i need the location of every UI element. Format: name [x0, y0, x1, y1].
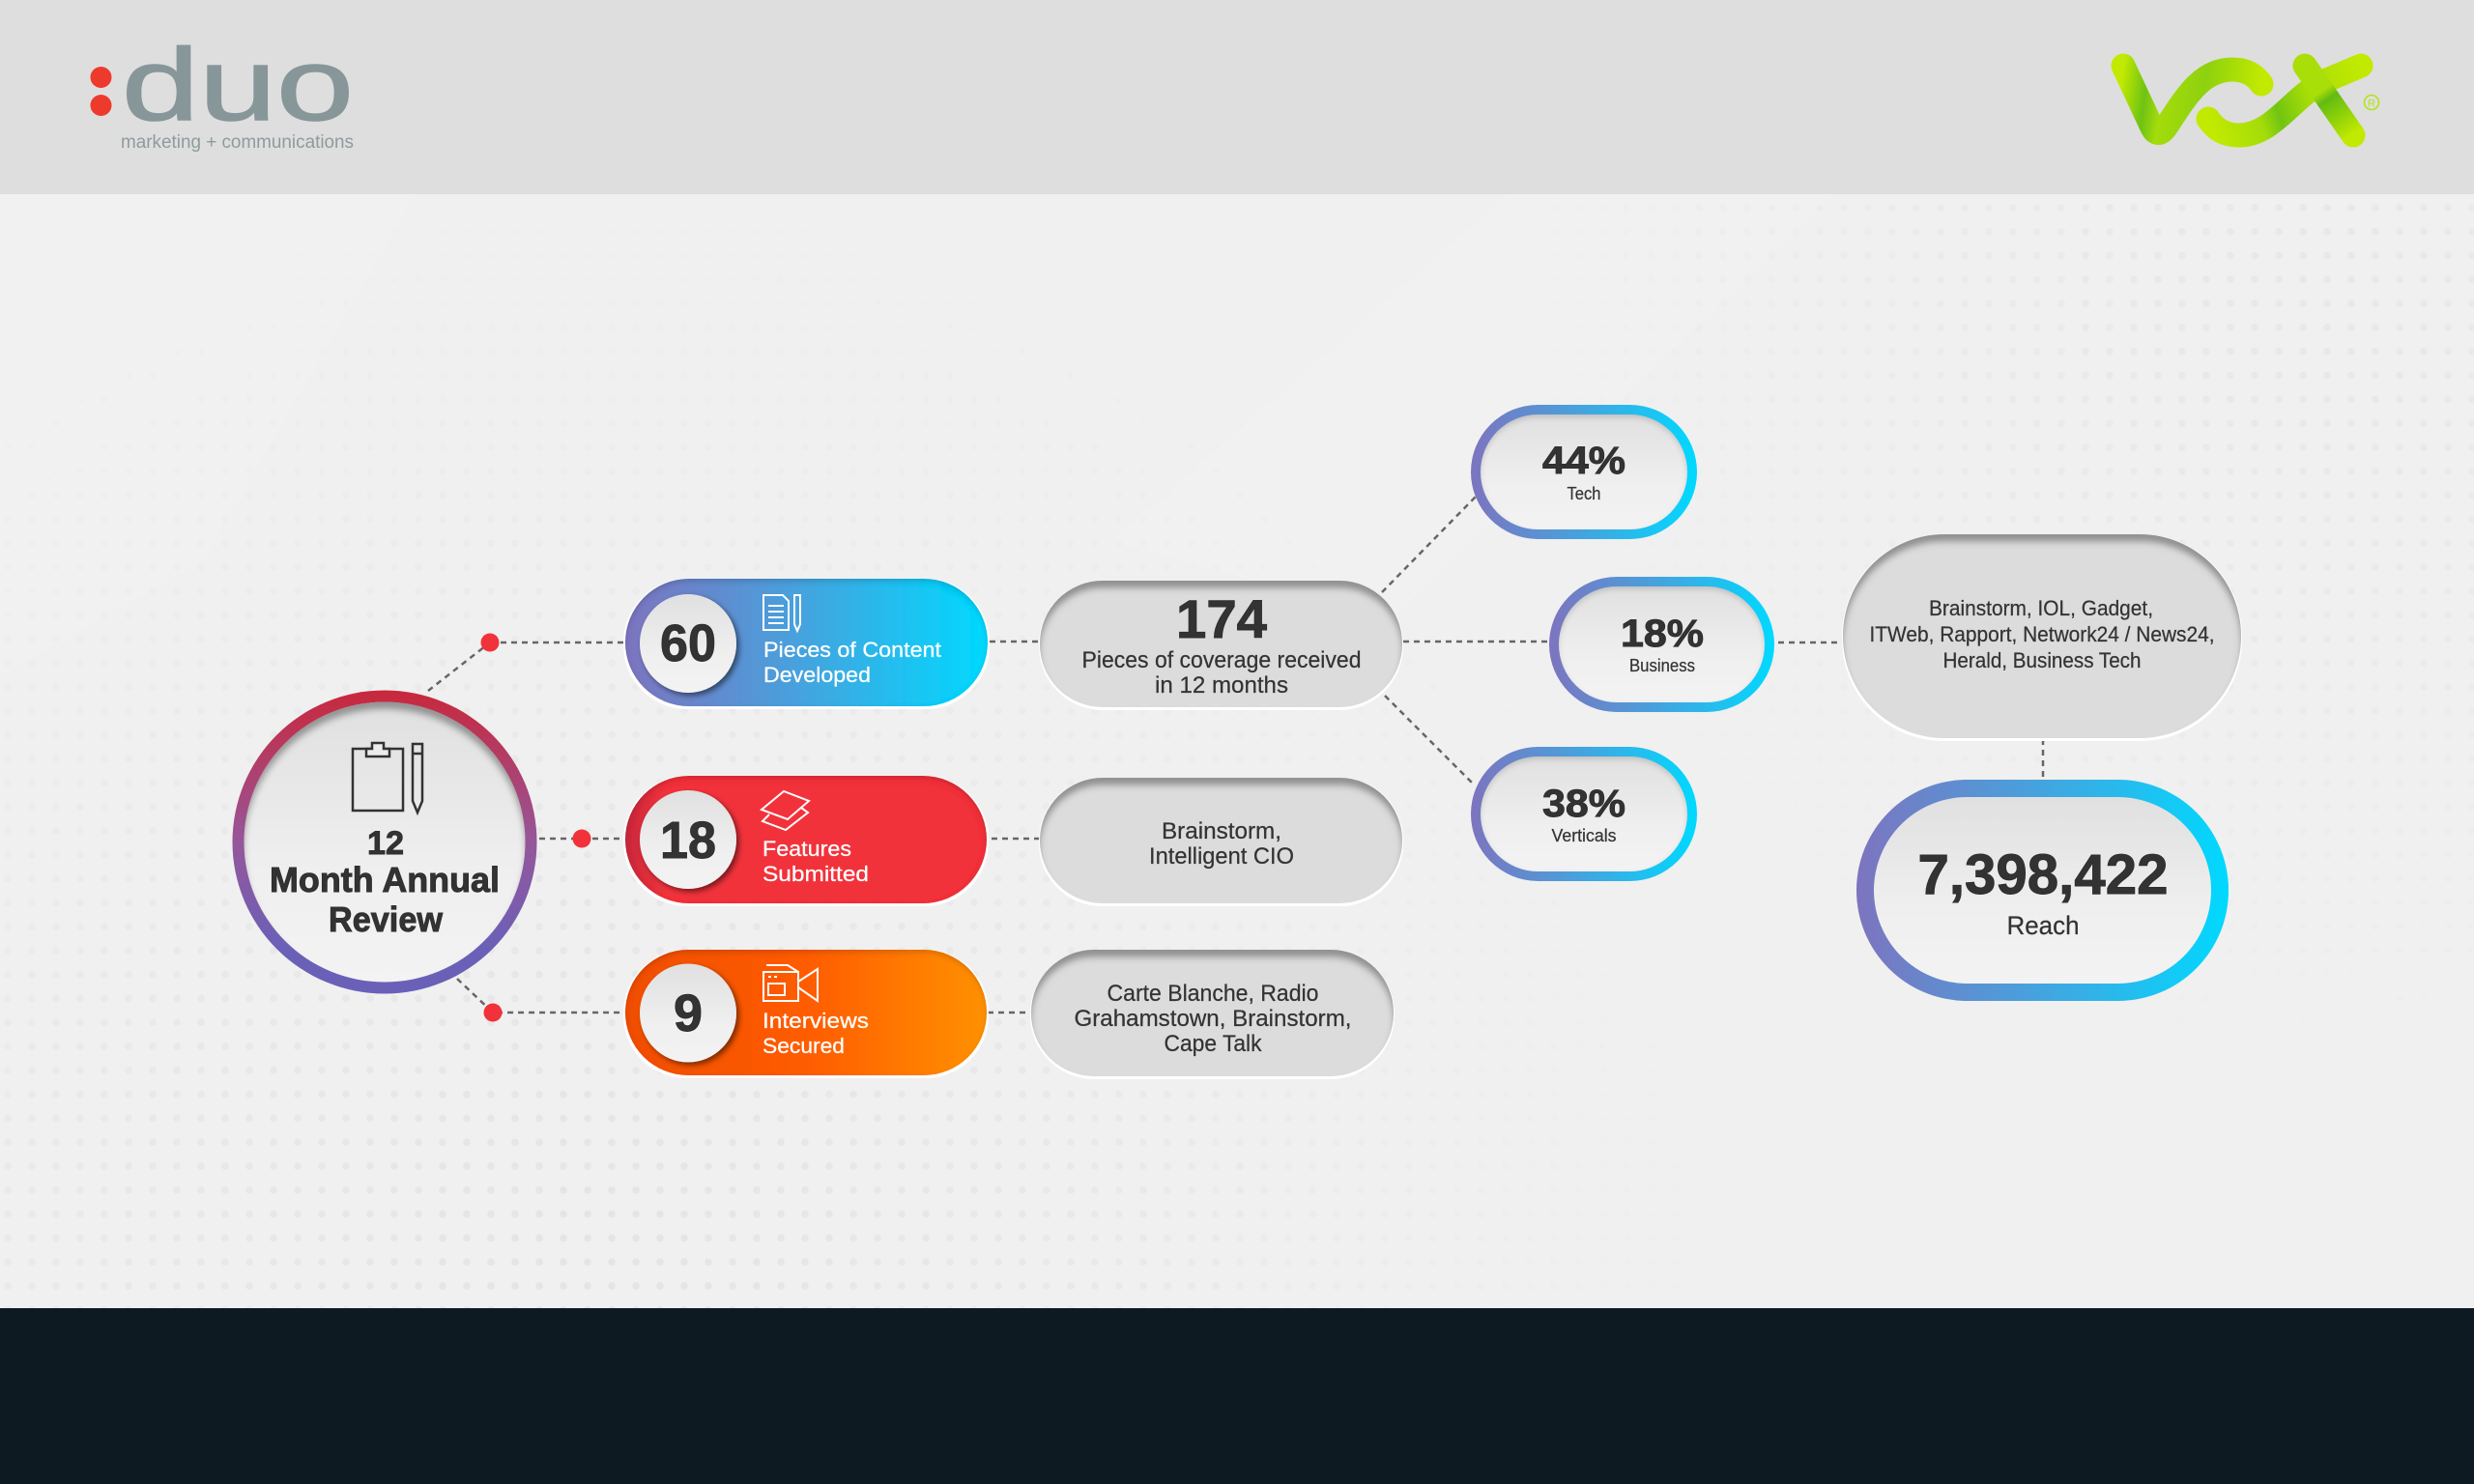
footer band [0, 1308, 2474, 1484]
icon: clipboard and pencil [353, 743, 422, 813]
pill: 9 interviews secured: Interviews [762, 1009, 869, 1033]
pill: 18 features submitted [623, 776, 989, 906]
icon: stacked sheets [762, 791, 809, 830]
header band [0, 0, 2474, 194]
grey pill: Brainstorm, Intelligent CIO: Brainstorm, [1162, 818, 1281, 844]
pill: 60 pieces of content: Pieces of Content [763, 638, 941, 662]
pill: 18 features submitted: 18 [660, 812, 716, 870]
grey pill: broadcast outlets: Grahamstown, Brainstorm, [1075, 1006, 1351, 1032]
grey pill: 174 pieces of coverage: 174 [1176, 588, 1267, 649]
pill: 60 pieces of content: Developed [763, 663, 871, 687]
logo: vox: R [2368, 99, 2375, 110]
ring pill: 44% tech: Tech [1568, 484, 1600, 503]
logo: vox [2123, 66, 2379, 135]
pill: 18 features submitted: Submitted [762, 862, 869, 886]
ring pill: 38% verticals [1471, 747, 1697, 881]
grey pill: publications list [1842, 534, 2242, 741]
ring pill: 7,398,422 reach: 7,398,422 [1917, 843, 2169, 906]
ring pill: 44% tech [1471, 405, 1697, 539]
pill: 60 pieces of content: 60 [660, 614, 716, 672]
grey pill: 174 pieces of coverage: Pieces of coverage received [1082, 647, 1361, 673]
ring pill: 38% verticals: 38% [1542, 783, 1625, 825]
logo: duo marketing + communications: marketing + communications [121, 132, 354, 153]
logo: duo marketing + communications: duo [122, 28, 354, 142]
connector: review to interviews [457, 979, 625, 1022]
logo: duo marketing + communications [91, 28, 354, 153]
icon: document and pencil [763, 595, 800, 631]
grey pill: 174 pieces of coverage: in 12 months [1155, 672, 1288, 699]
grey pill: broadcast outlets: Cape Talk [1164, 1031, 1262, 1057]
grey pill: 174 pieces of coverage [1039, 581, 1403, 710]
icon: video camera [763, 965, 818, 1001]
connectors: pills to grey outcomes [988, 642, 1040, 1013]
grey pill: broadcast outlets [1030, 950, 1395, 1079]
main circle: 12 Month Annual Review: Review [329, 899, 444, 939]
connectors: coverage to sector share [1382, 497, 2043, 784]
ring pill: 7,398,422 reach: Reach [2006, 911, 2080, 940]
main circle: 12 Month Annual Review [232, 690, 537, 993]
pill: 9 interviews secured: Secured [762, 1034, 845, 1058]
ring pill: 18% business: 18% [1621, 613, 1704, 655]
grey pill: Brainstorm, Intelligent CIO: Intelligent CIO [1149, 843, 1294, 870]
ring pill: 44% tech: 44% [1542, 440, 1625, 482]
grey pill: Brainstorm, Intelligent CIO [1039, 778, 1403, 906]
ring pill: 18% business: Business [1629, 656, 1695, 675]
grey pill: publications list: Brainstorm, IOL, Gadget, [1929, 596, 2153, 620]
ring pill: 38% verticals: Verticals [1552, 826, 1616, 845]
connector: review to content [428, 634, 625, 691]
grey pill: publications list: ITWeb, Rapport, Network24 / News24, [1869, 622, 2215, 646]
ring pill: 18% business [1549, 577, 1774, 712]
pill: 9 interviews secured: 9 [674, 985, 703, 1042]
pill: 9 interviews secured [623, 950, 989, 1078]
grey pill: publications list: Herald, Business Tech [1942, 648, 2142, 672]
main circle: 12 Month Annual Review: Month Annual [270, 860, 500, 899]
main circle: 12 Month Annual Review: 12 [367, 825, 404, 862]
pill: 18 features submitted: Features [762, 837, 851, 861]
grey pill: broadcast outlets: Carte Blanche, Radio [1108, 981, 1318, 1007]
pill: 60 pieces of content [623, 579, 990, 709]
ring pill: 7,398,422 reach [1856, 780, 2229, 1001]
connector: review to features [539, 829, 625, 848]
